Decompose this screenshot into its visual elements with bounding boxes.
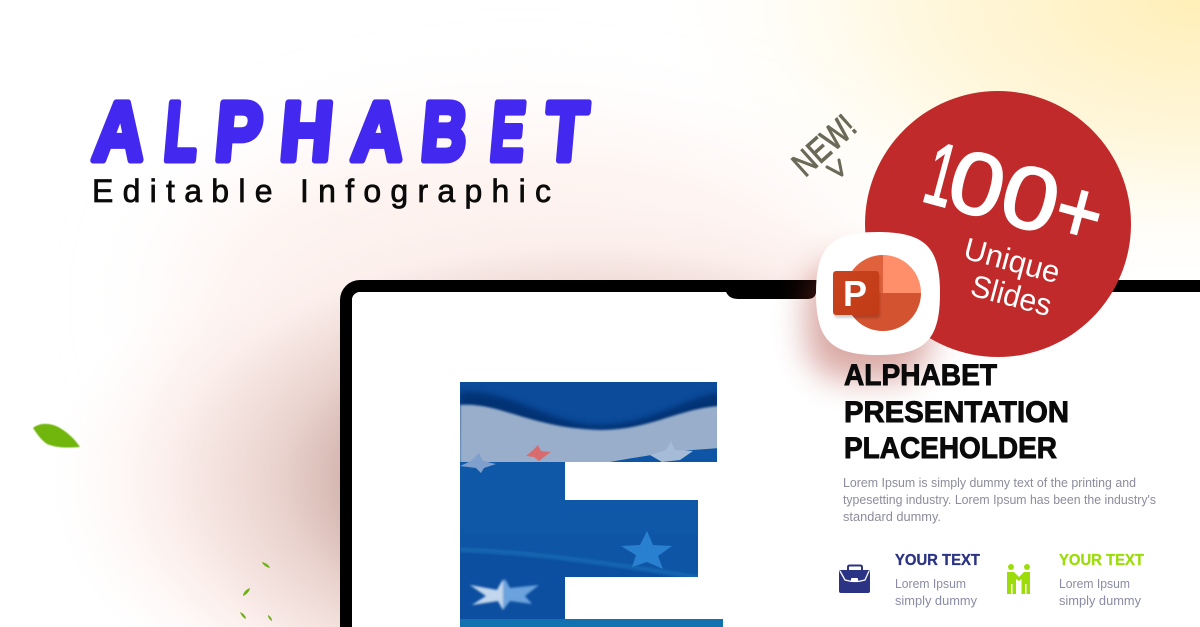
powerpoint logo: P <box>843 273 867 314</box>
title: A <box>90 85 149 178</box>
badge number: 0 <box>991 143 1070 253</box>
powerpoint icon shadow <box>806 262 931 380</box>
feature: your text green <box>1059 552 1144 608</box>
arrow: down chevron <box>827 160 842 175</box>
feature: your text green: Lorem Ipsum <box>1059 577 1130 591</box>
star: bright blue <box>621 531 672 569</box>
slide body text: typesetting industry. Lorem Ipsum has been the industry's <box>843 493 1156 507</box>
icon: briefcase <box>839 566 870 593</box>
title: B <box>418 85 471 178</box>
red circle badge <box>865 91 1131 357</box>
icon: handshake people <box>1007 564 1030 594</box>
feature: your text blue: Lorem Ipsum <box>895 577 966 591</box>
badge number: + <box>1045 158 1115 265</box>
feature: your text green: simply dummy <box>1059 594 1142 608</box>
star: blue-grey left <box>460 453 496 473</box>
feature: your text blue <box>895 552 980 608</box>
leaf: large <box>33 424 80 448</box>
title: L <box>161 85 202 178</box>
badge label: Unique <box>960 231 1064 290</box>
leaf: small cluster <box>240 562 272 621</box>
star: red <box>526 445 551 461</box>
badge number: 0 <box>938 129 1016 239</box>
laptop frame <box>340 280 1200 627</box>
subtitle: Editable Infographic <box>92 173 551 209</box>
slide heading: ALPHABET <box>844 359 997 392</box>
slide heading: PRESENTATION <box>844 396 1069 429</box>
feature: your text blue: YOUR TEXT <box>895 552 980 569</box>
star: pale <box>650 441 693 462</box>
slide body text: Lorem Ipsum is simply dummy text of the printing and <box>843 476 1136 490</box>
photo letter E <box>460 382 723 627</box>
title: H <box>277 85 337 178</box>
badge label <box>960 231 1064 323</box>
title: A <box>349 85 408 178</box>
slide body text <box>843 476 1156 524</box>
title: E <box>487 85 529 178</box>
slide heading: PLACEHOLDER <box>844 432 1057 465</box>
feature: your text green: YOUR TEXT <box>1059 552 1144 569</box>
badge number: 1 <box>915 123 968 226</box>
powerpoint icon tile <box>816 232 940 355</box>
slide body text: standard dummy. <box>843 510 941 524</box>
title: T <box>541 85 591 178</box>
feature: your text blue: simply dummy <box>895 594 978 608</box>
slide heading <box>844 359 1069 465</box>
star: blurred double <box>470 579 539 610</box>
badge label: Slides <box>967 268 1055 323</box>
title: P <box>212 85 266 178</box>
new callout: NEW! <box>785 108 864 184</box>
